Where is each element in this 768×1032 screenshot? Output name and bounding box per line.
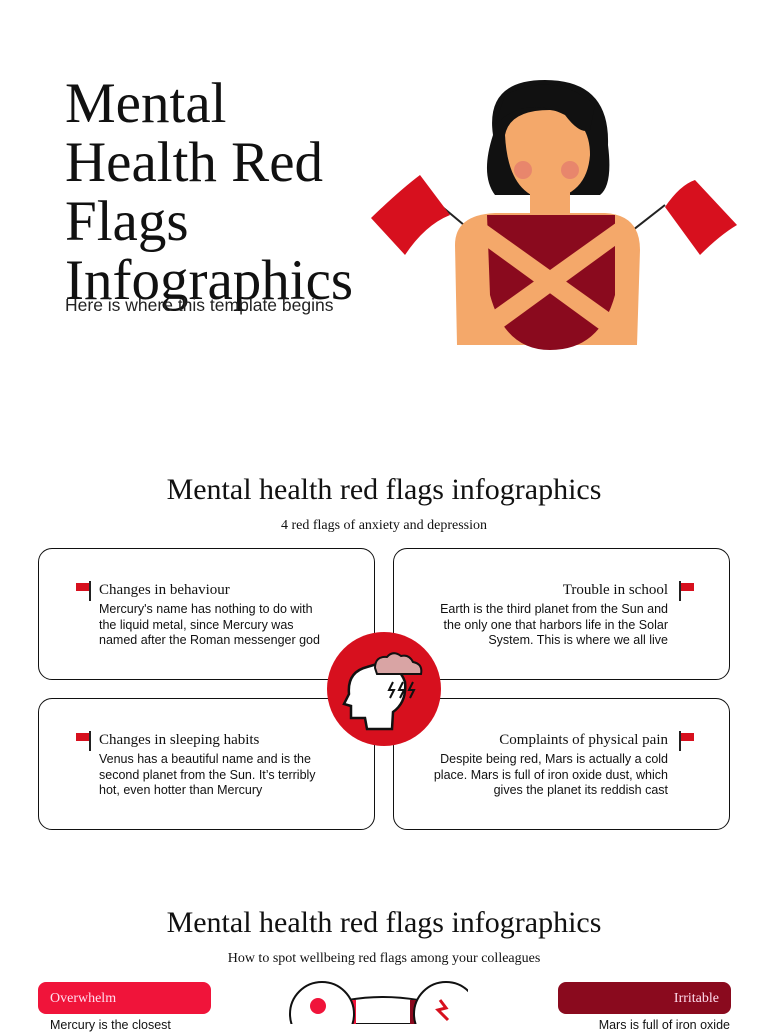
card: trouble in school: [393, 548, 730, 680]
illustration: woman with red flags: [371, 80, 737, 350]
card: trouble in school: Trouble in school: [563, 582, 668, 598]
title: Mental Health Red Flags Infographics: [65, 72, 353, 312]
card: changes in sleeping habits: Changes in sleeping habits: [99, 732, 259, 748]
heading: section 2: Mental health red flags infographics: [167, 906, 601, 939]
subtitle: Here is where this template begins: [65, 295, 333, 315]
card: changes in sleeping habits: [38, 698, 375, 830]
card: complaints of physical pain: Complaints of physical pain: [499, 732, 668, 748]
card: changes in behaviour: [38, 548, 375, 680]
diagram: connected head icons: [289, 981, 468, 1024]
label: irritable: [558, 982, 731, 1014]
label: overwhelm: [38, 982, 211, 1014]
subheading: section 1: 4 red flags of anxiety and depression: [281, 518, 487, 533]
heading: section 1: Mental health red flags infographics: [167, 473, 601, 506]
icon: head with storm cloud: [327, 632, 441, 746]
text: irritable description (cut off): Mars is full of iron oxide: [599, 1018, 730, 1032]
card: complaints of physical pain: Despite being red, Mars is actually a cold place. Mars is full of iron oxide dust, which gives the planet its reddish cast: [434, 752, 668, 797]
card: trouble in school: Earth is the third planet from the Sun and the only one that harbors life in the Solar System. This is where we all live: [440, 602, 668, 647]
text: overwhelm description (cut off): Mercury is the closest: [50, 1018, 171, 1032]
card: changes in sleeping habits: Venus has a beautiful name and is the second planet from the Sun. It’s terribly hot, even hotter than Mercury: [99, 752, 316, 797]
card: changes in behaviour: Mercury's name has nothing to do with the liquid metal, since Mercury was named after the Roman messenger god: [99, 602, 320, 647]
subheading: section 2: How to spot wellbeing red flags among your colleagues: [228, 951, 540, 966]
card: complaints of physical pain: [393, 698, 730, 830]
label: overwhelm: Overwhelm: [50, 991, 116, 1006]
card: changes in behaviour: Changes in behaviour: [99, 582, 230, 598]
label: irritable: Irritable: [674, 991, 719, 1006]
